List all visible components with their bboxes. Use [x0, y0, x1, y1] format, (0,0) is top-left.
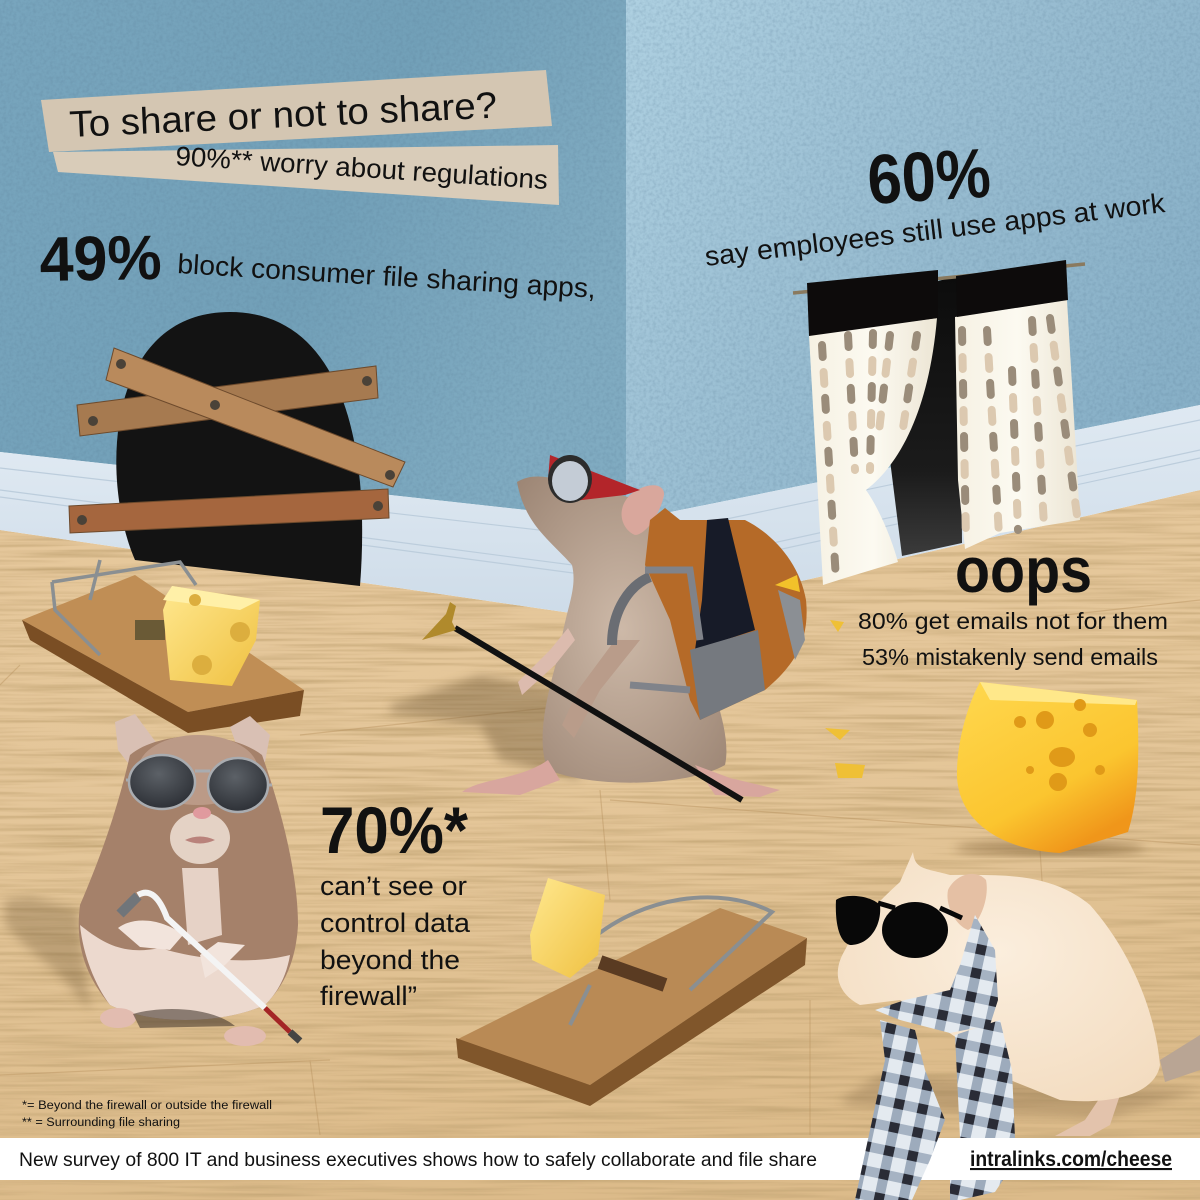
stat: 70 percent: beyond the: [320, 945, 460, 975]
banner text: New survey of 800 IT and business executives shows how to safely collaborate and file share: [19, 1149, 817, 1171]
banner link: intralinks.com/cheese: [970, 1148, 1172, 1171]
cheese cube: [530, 878, 605, 978]
crumbs: [825, 620, 865, 778]
scarf left tail: [855, 1020, 945, 1200]
cheese cube: [163, 586, 260, 686]
paper strip top: [41, 70, 552, 152]
cane: [422, 602, 742, 800]
boarded mouse hole: [69, 312, 405, 586]
oops block: [858, 534, 1168, 670]
feet: [100, 1008, 136, 1028]
mousetrap top left: [22, 560, 304, 733]
scarf right tail: [955, 1020, 1015, 1138]
muzzle: [170, 812, 230, 864]
oops block: 53% mistakenly send emails: [862, 644, 1158, 670]
rat ear: [622, 485, 664, 535]
curtain window: [793, 260, 1085, 585]
right baseboard: [626, 405, 1200, 621]
wall texture: [0, 0, 1200, 521]
hole: [116, 312, 362, 586]
tail: [1160, 1035, 1200, 1082]
board middle: [77, 366, 378, 436]
rat body: [517, 476, 726, 783]
cream rat with scarf: [836, 852, 1200, 1200]
curtain black header right: [956, 260, 1068, 317]
nails: [77, 359, 395, 525]
stat: 49 percent: 49%: [39, 223, 162, 295]
paper strip bottom: [53, 145, 559, 205]
oops block: oops: [955, 534, 1092, 606]
title banner: [41, 70, 559, 205]
board diagonal: [106, 348, 405, 487]
stat: 49 percent: [39, 223, 597, 304]
curtain rod: [793, 264, 1085, 293]
footnotes: ** = Surrounding file sharing: [22, 1117, 180, 1129]
red sunglasses: [548, 455, 640, 503]
lower white belly: [80, 925, 290, 1020]
ears: [115, 714, 158, 772]
mouth: [185, 836, 215, 844]
curtain pattern: [822, 318, 1077, 580]
stat: 49 percent: block consumer file sharing apps,: [177, 248, 597, 304]
rat feet: [462, 760, 780, 797]
oops block: 80% get emails not for them: [858, 608, 1168, 634]
arms: [118, 921, 245, 978]
left wall: [0, 0, 626, 521]
stat: 70 percent: control data: [320, 908, 471, 938]
right wall: [626, 0, 1200, 521]
footnotes: [22, 1100, 272, 1129]
ear: [947, 874, 987, 930]
cheese wedge: [825, 620, 1145, 856]
stat: 70 percent: firewall”: [320, 981, 417, 1011]
under-body shadow: [133, 1009, 235, 1028]
stat: 60 percent: 60%: [865, 134, 993, 219]
white cane: [138, 893, 265, 1008]
footnotes: *= Beyond the firewall or outside the firewall: [22, 1100, 272, 1112]
subtitle text: 90%** worry about regulations: [175, 141, 549, 195]
aviator sunglasses: [126, 755, 272, 812]
bottom white banner: [0, 1138, 1200, 1180]
right curtain: [955, 300, 1080, 549]
chest stripe: [182, 868, 222, 945]
floor planks: [0, 600, 1200, 1135]
shadow: [390, 675, 580, 780]
stat: 60 percent: [703, 134, 1167, 272]
stat: 70 percent: [320, 793, 471, 1011]
shadow: [5, 897, 90, 1010]
backpack: [645, 508, 807, 720]
floor: [0, 490, 1200, 1200]
scarf right tail end: [950, 1180, 1003, 1200]
scarf upper wrap: [875, 915, 998, 1033]
body and head: [838, 852, 1160, 1101]
hind leg: [1055, 1090, 1120, 1136]
dark opening: [870, 275, 962, 556]
board lower: [69, 489, 389, 533]
mousetrap bottom: [456, 878, 807, 1106]
title text: To share or not to share?: [69, 85, 498, 145]
left baseboard: [0, 452, 626, 621]
shadow: [840, 1075, 1200, 1120]
left curtain: [809, 318, 937, 585]
head tint: [138, 735, 258, 805]
floor wood grain: [0, 490, 1200, 1200]
rat with backpack: [390, 455, 807, 800]
nose: [193, 807, 211, 819]
rat arms: [518, 628, 575, 695]
curtain black header left: [807, 270, 938, 336]
stat: 60 percent: say employees still use apps at work: [703, 187, 1167, 272]
body: [79, 736, 298, 1020]
stat: 70 percent: 70%*: [320, 793, 468, 867]
hamster: [5, 714, 300, 1046]
sunglasses: [836, 896, 962, 958]
stat: 70 percent: can’t see or: [320, 871, 467, 901]
